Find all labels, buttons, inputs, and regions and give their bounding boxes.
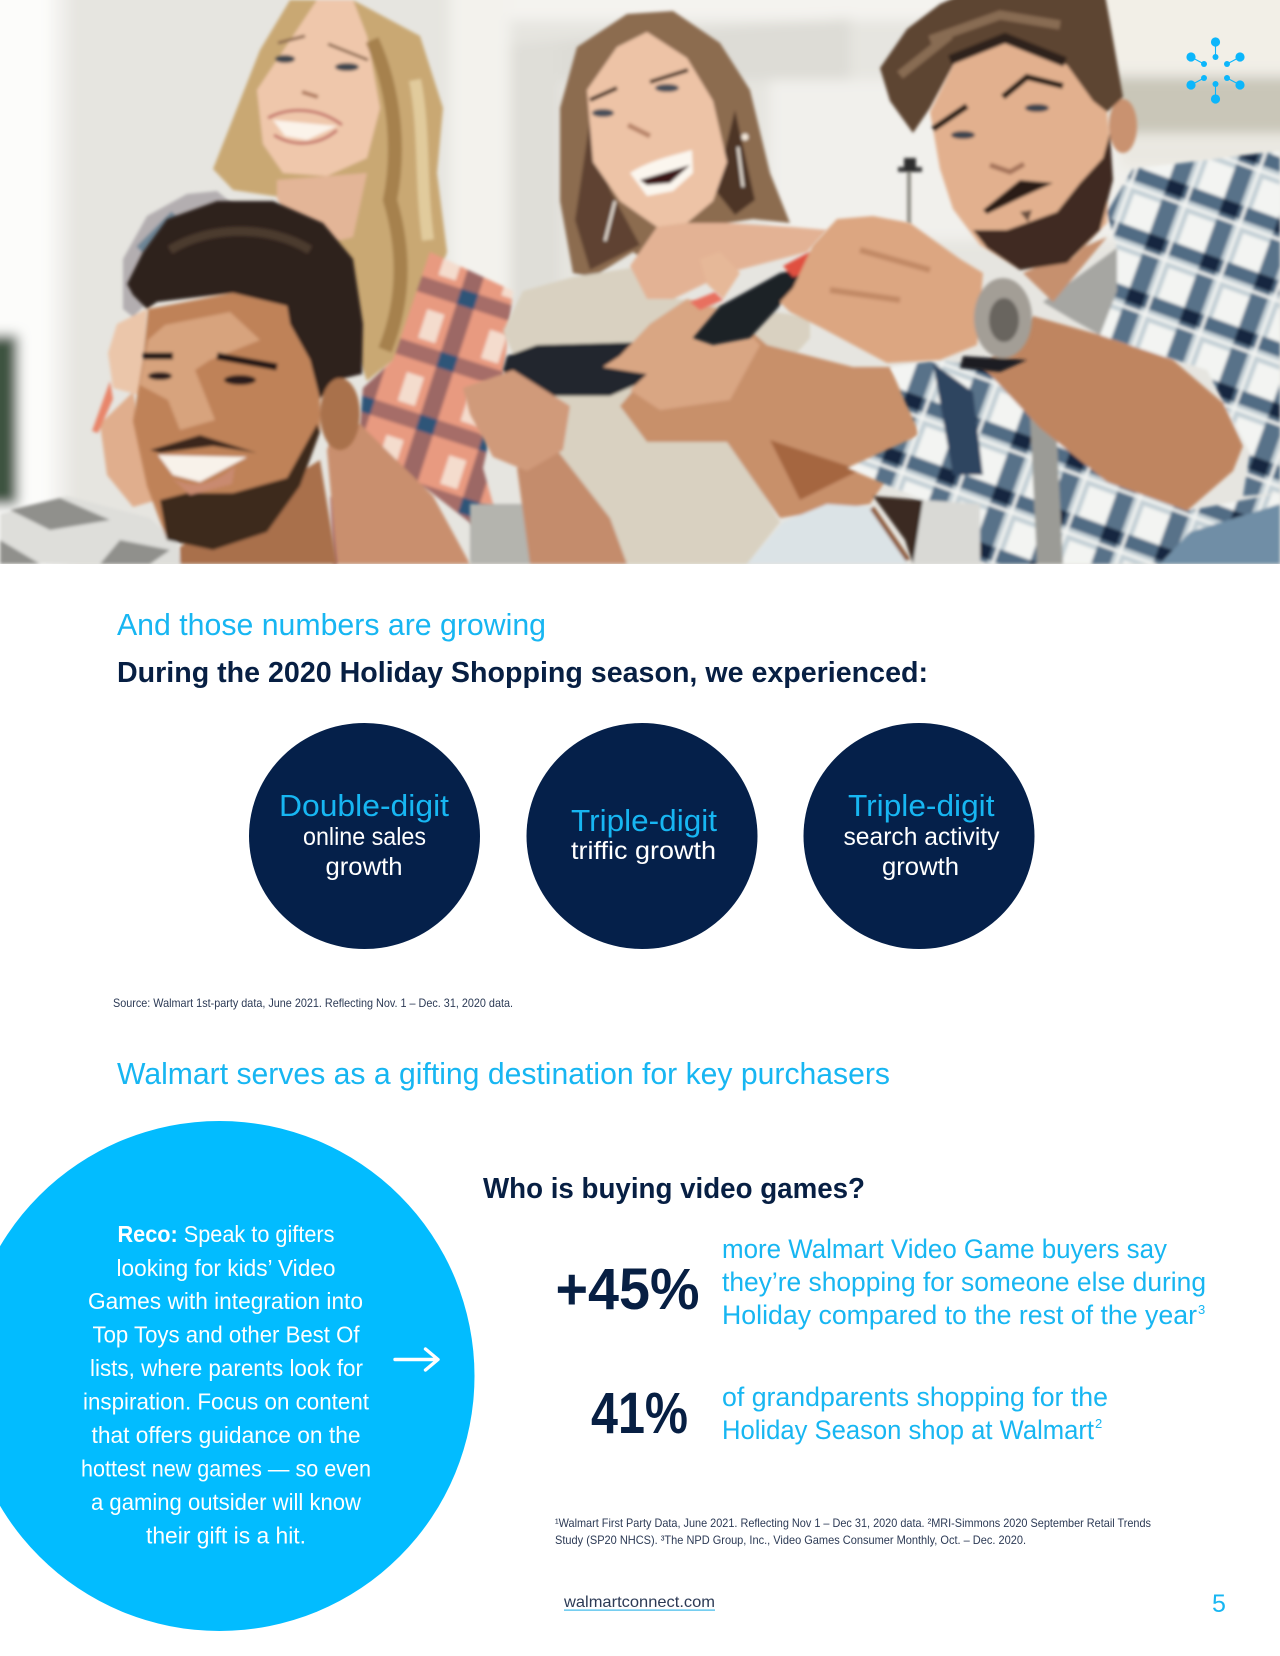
heading: And those numbers are growing: And those numbers are growing: [117, 607, 546, 642]
footnotes: Study (SP20 NHCS). ³The NPD Group, Inc., Video Games Consumer Monthly, Oct. – Dec. 2020.: [555, 1533, 1026, 1547]
stat circle: triple-digit traffic growth: triffic growth: [571, 837, 716, 865]
stat: +45%: 3: [1198, 1302, 1205, 1317]
footnotes: [555, 1516, 1151, 1547]
recommendation circle: Top Toys and other Best Of: [92, 1322, 360, 1348]
footer link: walmartconnect.com: [563, 1594, 715, 1611]
stat: 41%: Holiday Season shop at Walmart: [722, 1415, 1094, 1445]
photo: joy-con controller and hand with watch: [690, 216, 1032, 372]
recommendation circle: Games with integration into: [88, 1288, 363, 1314]
heading: Walmart serves as a gifting destination: Walmart serves as a gifting destination for key purchasers: [117, 1056, 890, 1091]
source note: Source: Walmart 1st-party data, June 2021. Reflecting Nov. 1 – Dec. 31, 2020 data.: [113, 996, 513, 1010]
stat circle: triple-digit traffic growth: Triple-digit: [571, 803, 717, 838]
photo: room background: [0, 0, 1280, 580]
recommendation circle: that offers guidance on the: [92, 1422, 360, 1448]
recommendation circle: their gift is a hit.: [146, 1522, 306, 1548]
recommendation circle: Reco: Speak to gifters: [118, 1221, 334, 1247]
stat circle: triple-digit traffic growth: [526, 723, 758, 949]
stat circle: triple-digit search activity growth: growth: [882, 853, 959, 881]
stat: +45%: they’re shopping for someone else during: [722, 1267, 1206, 1297]
logo: Walmart spark: [1186, 37, 1245, 104]
photo: man with curly hair: [0, 201, 363, 564]
stat: 41%: 2: [1095, 1416, 1102, 1431]
recommendation circle: [0, 1121, 474, 1631]
hero photo: four friends playing video games: [0, 0, 1280, 580]
stat circle: triple-digit search activity growth: [804, 723, 1034, 949]
heading: Who is buying video games: Who is buying video games?: [483, 1173, 865, 1205]
photo: bearded man in plaid: [847, 0, 1280, 564]
stat: 41%: 41%: [591, 1381, 688, 1446]
recommendation circle: looking for kids’ Video: [116, 1255, 336, 1281]
page number: 5: [1212, 1590, 1226, 1618]
recommendation circle: hottest new games — so even: [81, 1456, 371, 1482]
stat: +45%: more Walmart Video Game buyers say: [722, 1234, 1167, 1264]
photo: lamp: [898, 158, 922, 224]
stat circle: triple-digit search activity growth: search activity: [844, 823, 1000, 851]
stat circle: double-digit online sales growth: [249, 723, 480, 949]
arrow: [395, 1349, 438, 1370]
photo: blonde woman: [92, 0, 513, 564]
stat circle: double-digit online sales growth: Double-digit: [279, 788, 449, 823]
subheading: During the 2020 Holiday Shopping season: During the 2020 Holiday Shopping season, we experienced:: [117, 657, 928, 689]
stat: 41%: of grandparents shopping for the: [722, 1382, 1108, 1412]
recommendation circle: a gaming outsider will know: [91, 1489, 362, 1515]
stat: 41%: [591, 1381, 1108, 1446]
stat circle: double-digit online sales growth: growth: [326, 853, 402, 881]
recommendation circle: inspiration. Focus on content: [83, 1388, 369, 1414]
recommendation circle: lists, where parents look for: [90, 1355, 363, 1381]
footnotes: ¹Walmart First Party Data, June 2021. Reflecting Nov 1 – Dec 31, 2020 data. ²MRI-Simmons 2020 September Retail Trends: [555, 1516, 1151, 1530]
stat circle: triple-digit search activity growth: Triple-digit: [848, 788, 995, 823]
stat: +45%: Holiday compared to the rest of the year: [722, 1300, 1197, 1330]
stat: +45%: +45%: [556, 1257, 700, 1322]
stat: +45%: [556, 1234, 1206, 1330]
stat circle: double-digit online sales growth: online sales: [303, 823, 426, 851]
photo: laughing woman with controller: [463, 11, 920, 564]
